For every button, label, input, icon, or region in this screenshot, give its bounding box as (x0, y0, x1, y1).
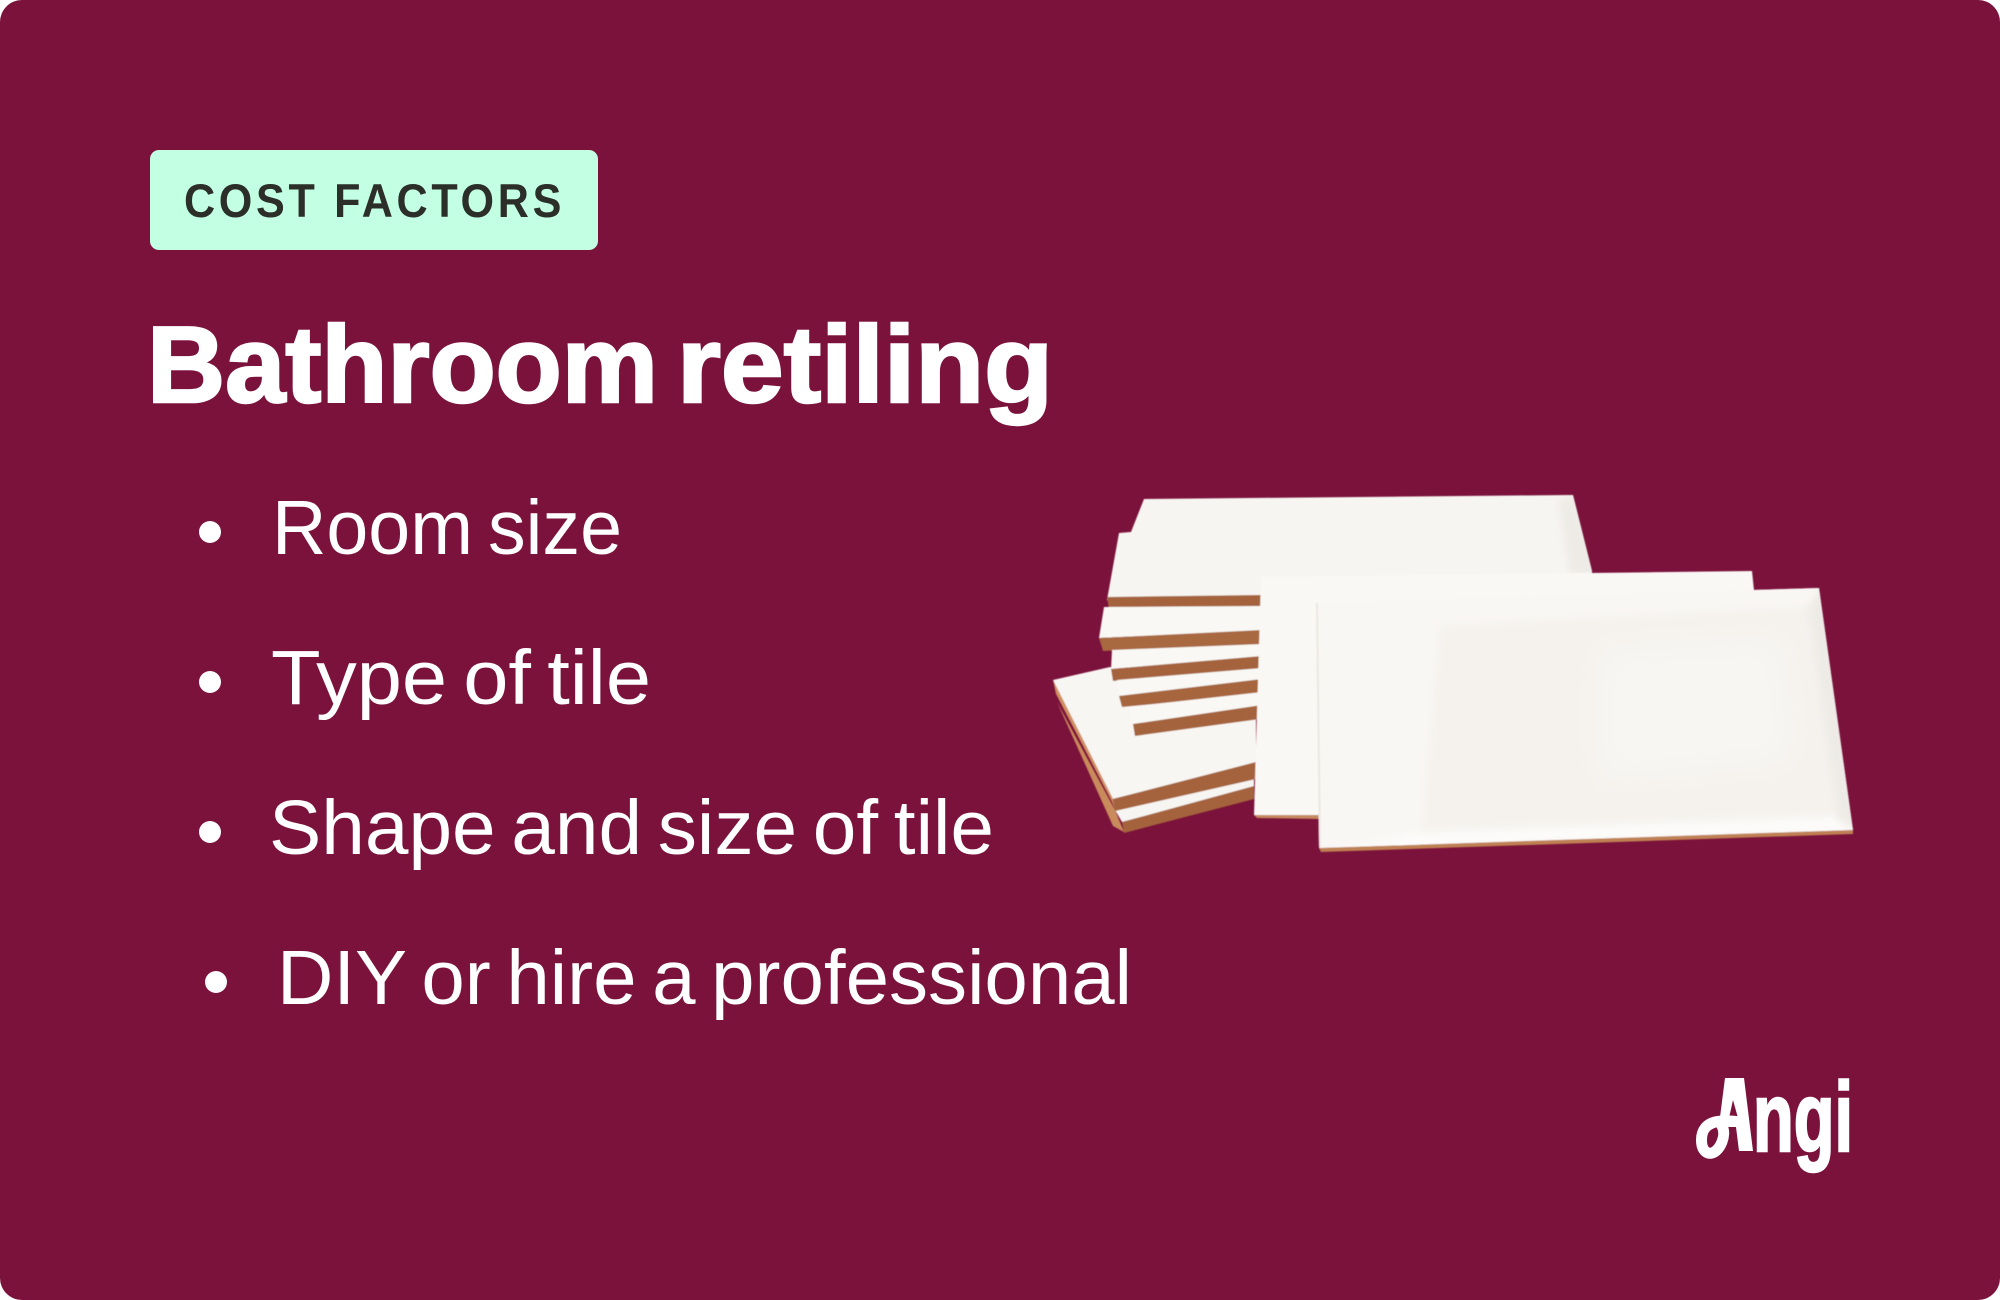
logo: Angi: ngi (1753, 1062, 1853, 1172)
tile: lower left top (1053, 667, 1256, 811)
bullet list: cost factors (199, 485, 1132, 1021)
title: Bathroom (147, 304, 658, 426)
logo: Angi (1702, 1062, 1853, 1172)
tile: stack layer 3 (1111, 644, 1262, 681)
tile: stack layer 5 (1128, 692, 1262, 736)
title: retiling (677, 304, 1053, 426)
badge: cost factors (150, 150, 598, 250)
tile: stack layer 2 (1099, 606, 1262, 651)
list item: type of tile: Type of tile (271, 635, 651, 721)
badge: cost factors: COST FACTORS (184, 174, 565, 227)
list item: DIY or hire a professional: DIY or hire a professional (277, 935, 1132, 1021)
title (147, 304, 1053, 426)
list item: shape and size of tile: Shape and size of tile (269, 785, 994, 871)
tile: middle upright (1254, 571, 1755, 819)
tile: lower left bottom (1057, 702, 1254, 833)
logo: Angi: A (1724, 1071, 1748, 1138)
illustration: stack of white tiles (1053, 495, 1860, 852)
tile: stacked back tile (1107, 495, 1600, 609)
tile: stack layer 4 (1117, 668, 1262, 707)
tile: front upright (1310, 583, 1860, 852)
list item: room size: Room size (272, 485, 622, 571)
